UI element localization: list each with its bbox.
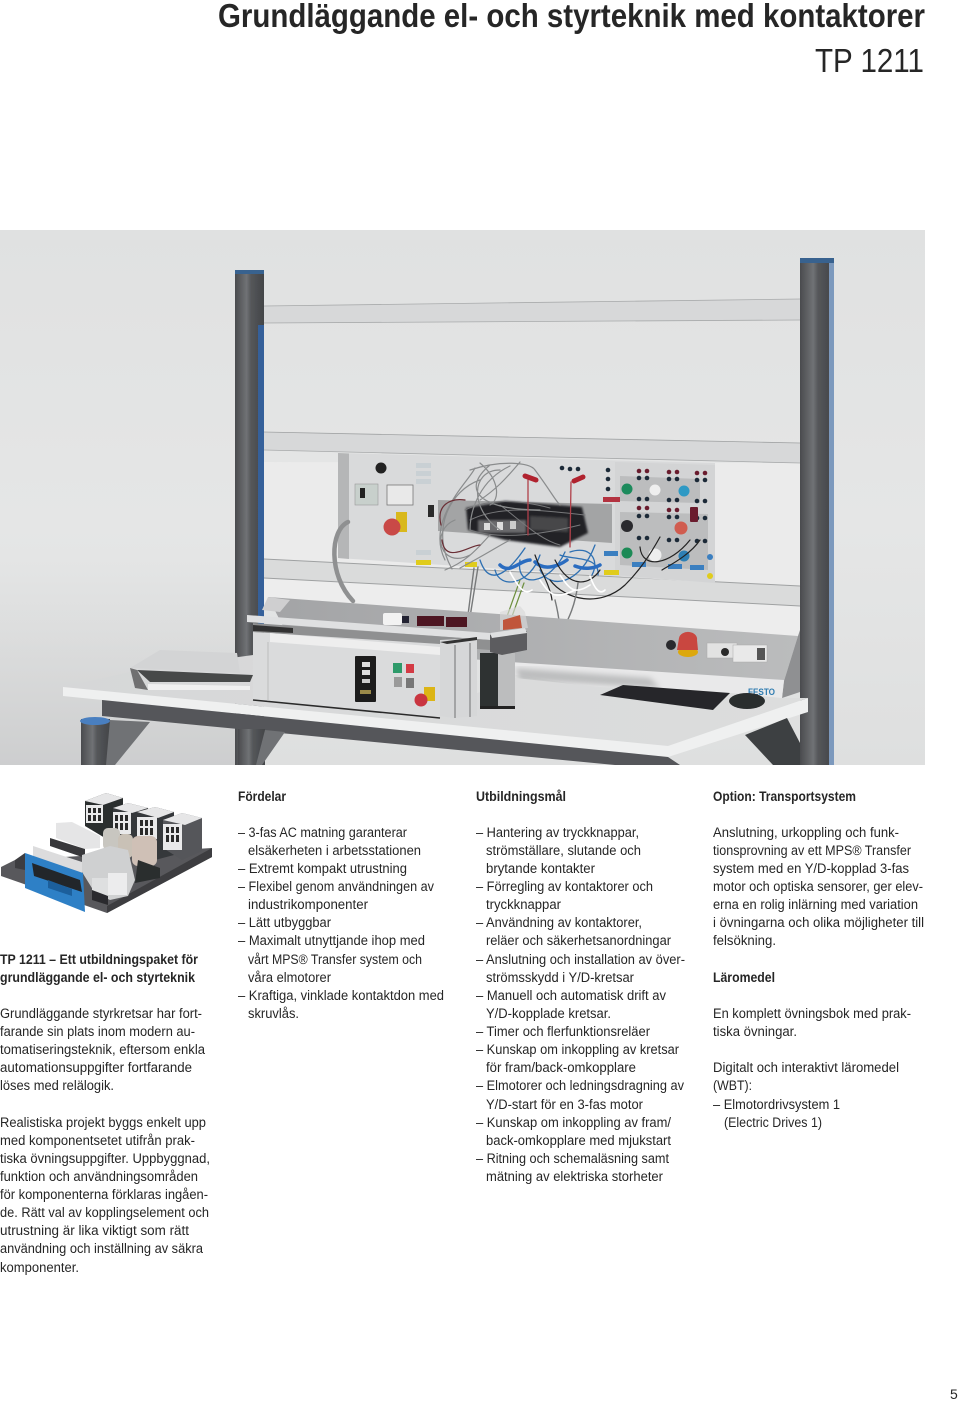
intro paragraph 1: löses med relälogik. <box>0 1078 114 1093</box>
intro paragraph 1: automationsuppgifter fortfarande <box>0 1060 192 1075</box>
upright posts <box>235 258 834 765</box>
learning goals list: brytande kontakter <box>486 861 595 876</box>
benefits list: – Flexibel genom användningen av <box>238 879 434 894</box>
contactors <box>85 793 202 860</box>
learning materials text: En komplett övningsbok med prak- <box>713 1006 911 1021</box>
blue wiring comb <box>15 853 85 912</box>
benefits list: skruvlås. <box>248 1006 299 1021</box>
benefits list: våra elmotorer <box>248 970 331 985</box>
black contactor cluster <box>465 501 588 547</box>
learning goals list: tryckknappar <box>486 897 561 912</box>
intro paragraph 2: komponenter. <box>0 1260 79 1275</box>
intro paragraph 1: Grundläggande styrkretsar har fort- <box>0 1006 202 1021</box>
intro paragraph 2: Realistiska projekt byggs enkelt upp <box>0 1115 206 1130</box>
relays <box>103 828 160 883</box>
heading: Utbildningsmål: Utbildningsmål <box>476 789 566 804</box>
intro paragraph 2: användning och inställning av säkra <box>0 1241 203 1256</box>
option paragraph: Anslutning, urkoppling och funk- <box>713 825 899 840</box>
option paragraph: motor och optiska sensorer, ger elev- <box>713 879 923 894</box>
learning goals list: – Kunskap om inkoppling av kretsar <box>476 1042 679 1057</box>
heading: Option: Transportsystem: Option: Transportsystem <box>713 789 856 804</box>
learning goals list: – Elmotorer och ledningsdragning av <box>476 1078 684 1093</box>
option paragraph: erna en rolig inlärning med variation <box>713 897 918 912</box>
main photo: training workstation <box>0 230 925 765</box>
intro column <box>0 952 210 1275</box>
column: Utbildningsmål <box>476 789 685 1184</box>
learning goals list: – Ritning och schemaläsning samt <box>476 1151 669 1166</box>
circuit breakers and overload relay <box>33 822 135 905</box>
conveyor motor <box>490 631 527 655</box>
benefits list: vårt MPS® Transfer system och <box>248 952 422 967</box>
learning goals list: – Anslutning och installation av över- <box>476 952 685 967</box>
learning goals list: – Kunskap om inkoppling av fram/ <box>476 1115 671 1130</box>
table legs and braces <box>80 717 800 765</box>
back wall panels <box>264 462 800 640</box>
intro paragraph 2: funktion och användningsområden <box>0 1169 198 1184</box>
column: Fördelar <box>238 789 444 1021</box>
back console <box>262 597 800 698</box>
learning goals list: strömställare, slutande och <box>486 843 641 858</box>
heading: Fördelar: Fördelar <box>238 789 287 804</box>
learning materials text <box>713 1006 911 1130</box>
learning goals list: back-omkopplare med mjukstart <box>486 1133 671 1148</box>
benefits list: – Lätt utbyggbar <box>238 915 331 930</box>
heading: Läromedel: Läromedel <box>713 970 775 985</box>
keyboard <box>600 685 730 710</box>
conveyor push buttons <box>393 663 414 688</box>
mouse <box>729 693 765 709</box>
learning goals list: – Manuell och automatisk drift av <box>476 988 666 1003</box>
benefits list: – Maximalt utnyttjande ihop med <box>238 933 425 948</box>
learning goals list: Y/D-start för en 3-fas motor <box>486 1097 643 1112</box>
option paragraph: tionsprovning av ett MPS® Transfer <box>713 843 911 858</box>
intro paragraph 2 <box>0 1115 210 1275</box>
intro paragraph 2: med komponentsetet utifrån prak- <box>0 1133 195 1148</box>
learning materials text: tiska övningar. <box>713 1024 797 1039</box>
document holder on table <box>130 650 253 690</box>
wiring <box>334 462 700 668</box>
subtitle: TP 1211: TP 1211 <box>815 42 924 79</box>
column: Option and Läromedel <box>713 789 924 1130</box>
option paragraph <box>713 825 924 948</box>
intro paragraph 1: farande sin plats inom modern au- <box>0 1024 195 1039</box>
learning goals list: – Hantering av tryckknappar, <box>476 825 639 840</box>
learning materials text: – Elmotordrivsystem 1 <box>713 1097 840 1112</box>
option paragraph: system med en Y/D-kopplad 3-fas <box>713 861 909 876</box>
FESTO wordmark: FESTO <box>748 687 775 698</box>
intro heading <box>0 952 199 985</box>
learning goals list: mätning av elektriska storheter <box>486 1169 663 1184</box>
learning goals list: – Timer och flerfunktionsreläer <box>476 1024 650 1039</box>
learning goals list: reläer och säkerhetsanordningar <box>486 933 671 948</box>
option paragraph: felsökning. <box>713 933 776 948</box>
benefits list: – Kraftiga, vinklade kontaktdon med <box>238 988 444 1003</box>
benefits list: – 3-fas AC matning garanterar <box>238 825 407 840</box>
benefits list: – Extremt kompakt utrustning <box>238 861 407 876</box>
conveyor unit <box>247 606 528 718</box>
learning goals list <box>476 825 685 1184</box>
product photo: component tray <box>1 793 212 913</box>
page number: 5 <box>950 1386 958 1402</box>
intro paragraph 1: tomatiseringsteknik, eftersom enkla <box>0 1042 205 1057</box>
conveyor terminal block <box>355 656 376 702</box>
intro paragraph 2: tiska övningsuppgifter. Uppbyggnad, <box>0 1151 210 1166</box>
learning goals list: – Användning av kontaktorer, <box>476 915 642 930</box>
benefits list <box>238 825 444 1021</box>
option paragraph: i övningarna och olika möjligheter till <box>713 915 924 930</box>
control module plates <box>338 453 715 583</box>
learning materials text: (WBT): <box>713 1078 752 1093</box>
learning goals list: – Förregling av kontaktorer och <box>476 879 653 894</box>
intro paragraph 1 <box>0 1006 205 1093</box>
learning materials text: Digitalt och interaktivt läromedel <box>713 1060 899 1075</box>
intro paragraph 2: de. Rätt val av kopplingselement och <box>0 1205 209 1220</box>
console emergency stop <box>666 632 698 657</box>
intro heading: TP 1211 – Ett utbildningspaket för <box>0 952 199 967</box>
intro paragraph 2: utrustning är lika viktigt som rätt <box>0 1223 189 1238</box>
table <box>63 655 808 765</box>
learning goals list: Y/D-kopplade kretsar. <box>486 1006 611 1021</box>
aluminium rails <box>264 299 800 606</box>
intro heading: grundläggande el- och styrteknik <box>0 970 195 985</box>
learning goals list: strömsskydd i Y/D-kretsar <box>486 970 634 985</box>
learning goals list: för fram/back-omkopplare <box>486 1060 636 1075</box>
intro paragraph 2: för komponenterna förklaras ingåen- <box>0 1187 208 1202</box>
learning materials text: (Electric Drives 1) <box>724 1115 822 1130</box>
benefits list: elsäkerheten i arbetsstationen <box>248 843 421 858</box>
benefits list: industrikomponenter <box>248 897 368 912</box>
